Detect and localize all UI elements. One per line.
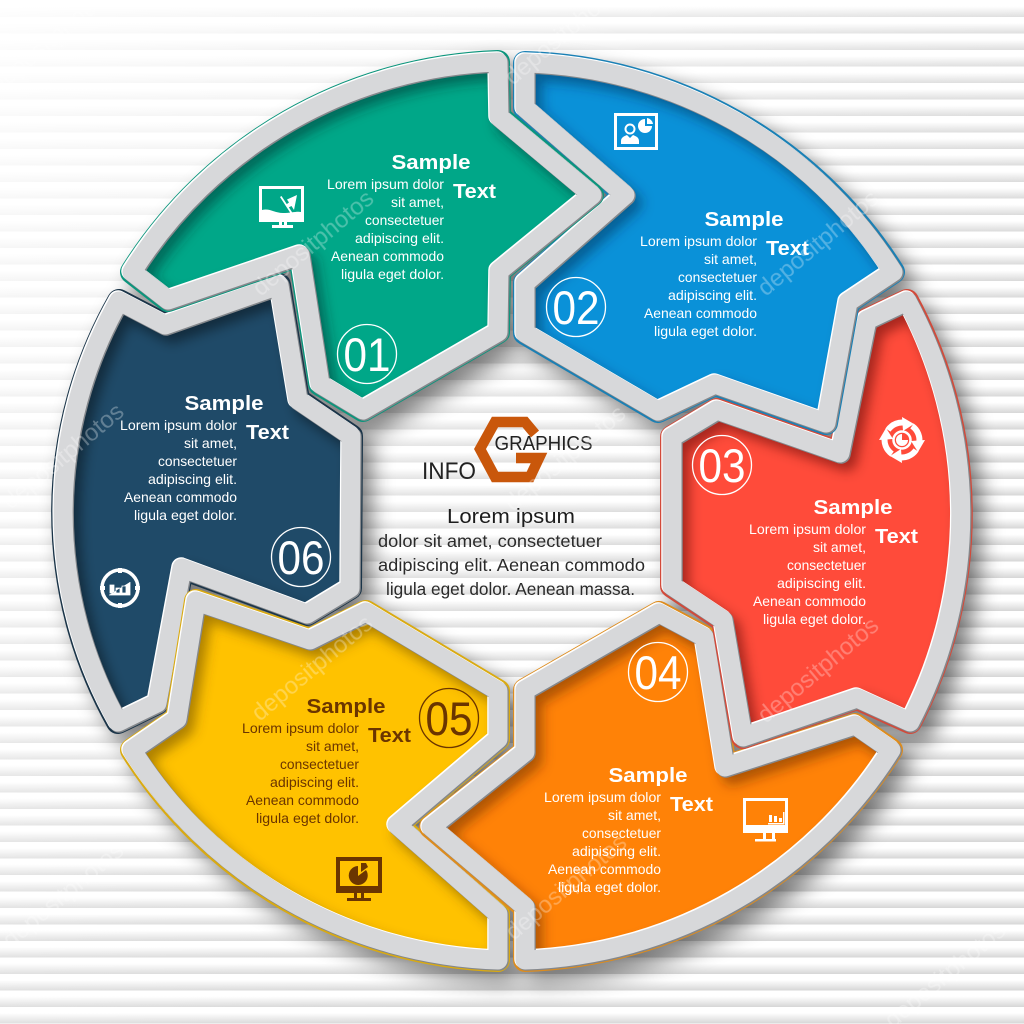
text block: segment 01: Aenean commodo xyxy=(331,248,444,264)
logo word GRAPHICS: GRAPHICS xyxy=(494,433,592,455)
text block: segment 06: consectetuer xyxy=(158,453,237,469)
panel: segment 05 yellow xyxy=(131,600,505,968)
text block: segment 01: consectetuer xyxy=(365,212,444,228)
text block: segment 05: ligula eget dolor. xyxy=(256,810,359,826)
icon: presenter with pie chart xyxy=(614,113,658,150)
center paragraph xyxy=(378,531,645,599)
icon: target chart xyxy=(100,568,140,608)
panel: segment 06 navy xyxy=(62,284,358,730)
watermarks: depositphotos xyxy=(247,185,379,302)
text block: segment 06: Aenean commodo xyxy=(124,489,237,505)
icon: monitor with arrow xyxy=(259,186,304,228)
text block: segment 03: Sample xyxy=(814,497,892,519)
text block: segment 06: Sample xyxy=(184,393,264,415)
text block: segment 01: Lorem ipsum dolor xyxy=(327,176,444,192)
text block: segment 03: Lorem ipsum dolor xyxy=(749,521,866,537)
text block: segment 02: Lorem ipsum dolor xyxy=(640,233,757,249)
text block: segment 02 xyxy=(640,209,809,339)
watermarks: depositphotos xyxy=(752,612,884,729)
icon: monitor with bar chart xyxy=(743,798,788,842)
text block: segment 05: Lorem ipsum dolor xyxy=(242,720,359,736)
watermarks: depositphotos xyxy=(499,400,631,517)
text block: segment 04: Sample xyxy=(608,765,688,787)
text block: segment 05: Sample xyxy=(306,696,386,718)
number badge 04: 04 xyxy=(634,646,682,699)
panel: segment 04 orange xyxy=(430,612,898,968)
text block: segment 06: Text xyxy=(246,422,289,444)
text block: segment 06: Lorem ipsum dolor xyxy=(120,417,237,433)
text block: segment 01: sit amet, xyxy=(391,194,444,210)
panel: segment 01 green xyxy=(131,61,599,418)
text block: segment 03: ligula eget dolor. xyxy=(763,611,866,627)
number badge 02: 02 xyxy=(552,281,600,334)
number badge 06: 06 xyxy=(278,531,324,584)
text block: segment 01: Sample xyxy=(392,152,470,174)
text block: segment 03: consectetuer xyxy=(787,557,866,573)
text block: segment 02: sit amet, xyxy=(704,251,757,267)
text block: segment 05 xyxy=(242,696,411,826)
panel: segment 02 blue xyxy=(524,62,900,431)
text block: segment 03: Aenean commodo xyxy=(753,593,866,609)
text block: segment 04: Aenean commodo xyxy=(548,861,661,877)
text block: segment 03: adipiscing elit. xyxy=(777,575,866,591)
text block: segment 03: Text xyxy=(875,526,918,548)
watermarks: depositphotos xyxy=(0,837,129,954)
text block: segment 02: Text xyxy=(766,238,809,260)
text block: segment 04: Lorem ipsum dolor xyxy=(544,789,661,805)
text block: segment 04 xyxy=(544,765,713,895)
center paragraph: ligula eget dolor. Aenean massa. xyxy=(386,579,635,599)
logo word INFO: INFO xyxy=(422,458,476,485)
watermarks: depositphotos xyxy=(752,185,884,302)
text block: segment 04: adipiscing elit. xyxy=(572,843,661,859)
number badge 03: 03 xyxy=(698,439,746,492)
text block: segment 04: Text xyxy=(670,794,713,816)
text block: segment 01: ligula eget dolor. xyxy=(341,266,444,282)
text block: segment 02: adipiscing elit. xyxy=(668,287,757,303)
watermarks: depositphotos xyxy=(246,610,378,727)
panel: segment 03 red xyxy=(671,300,968,745)
text block: segment 06: adipiscing elit. xyxy=(148,471,237,487)
text block: segment 06: sit amet, xyxy=(184,435,237,451)
text block: segment 06: ligula eget dolor. xyxy=(134,507,237,523)
text block: segment 04: sit amet, xyxy=(608,807,661,823)
icon: cycle arrows xyxy=(879,417,925,463)
text block: segment 03: sit amet, xyxy=(813,539,866,555)
text block: segment 05: consectetuer xyxy=(280,756,359,772)
text block: segment 04: consectetuer xyxy=(582,825,661,841)
text block: segment 01: adipiscing elit. xyxy=(355,230,444,246)
center heading: Lorem ipsum xyxy=(447,506,575,528)
center paragraph: adipiscing elit. Aenean commodo xyxy=(378,555,645,575)
text block: segment 05: Text xyxy=(368,725,411,747)
logo mark: hexagonal G xyxy=(480,422,539,477)
text block: segment 03 xyxy=(749,497,918,627)
text block: segment 05: adipiscing elit. xyxy=(270,774,359,790)
text block: segment 01 xyxy=(327,152,496,282)
text block: segment 05: Aenean commodo xyxy=(246,792,359,808)
text block: segment 02: Sample xyxy=(704,209,784,231)
center logo xyxy=(422,422,592,485)
number badge 05: 05 xyxy=(426,692,472,745)
text block: segment 04: ligula eget dolor. xyxy=(558,879,661,895)
center paragraph: dolor sit amet, consectetuer xyxy=(378,531,602,551)
watermarks: depositphotos xyxy=(500,829,632,946)
drop shadows under the ring xyxy=(73,74,971,972)
number badge 01: 01 xyxy=(344,328,390,381)
watermarks: depositphotos xyxy=(0,398,129,515)
text block: segment 02: Aenean commodo xyxy=(644,305,757,321)
text block: segment 02: consectetuer xyxy=(678,269,757,285)
text block: segment 02: ligula eget dolor. xyxy=(654,323,757,339)
icon: monitor with pie chart xyxy=(336,857,382,901)
text block: segment 01: Text xyxy=(453,181,496,203)
text block: segment 06 xyxy=(120,393,289,523)
text block: segment 05: sit amet, xyxy=(306,738,359,754)
